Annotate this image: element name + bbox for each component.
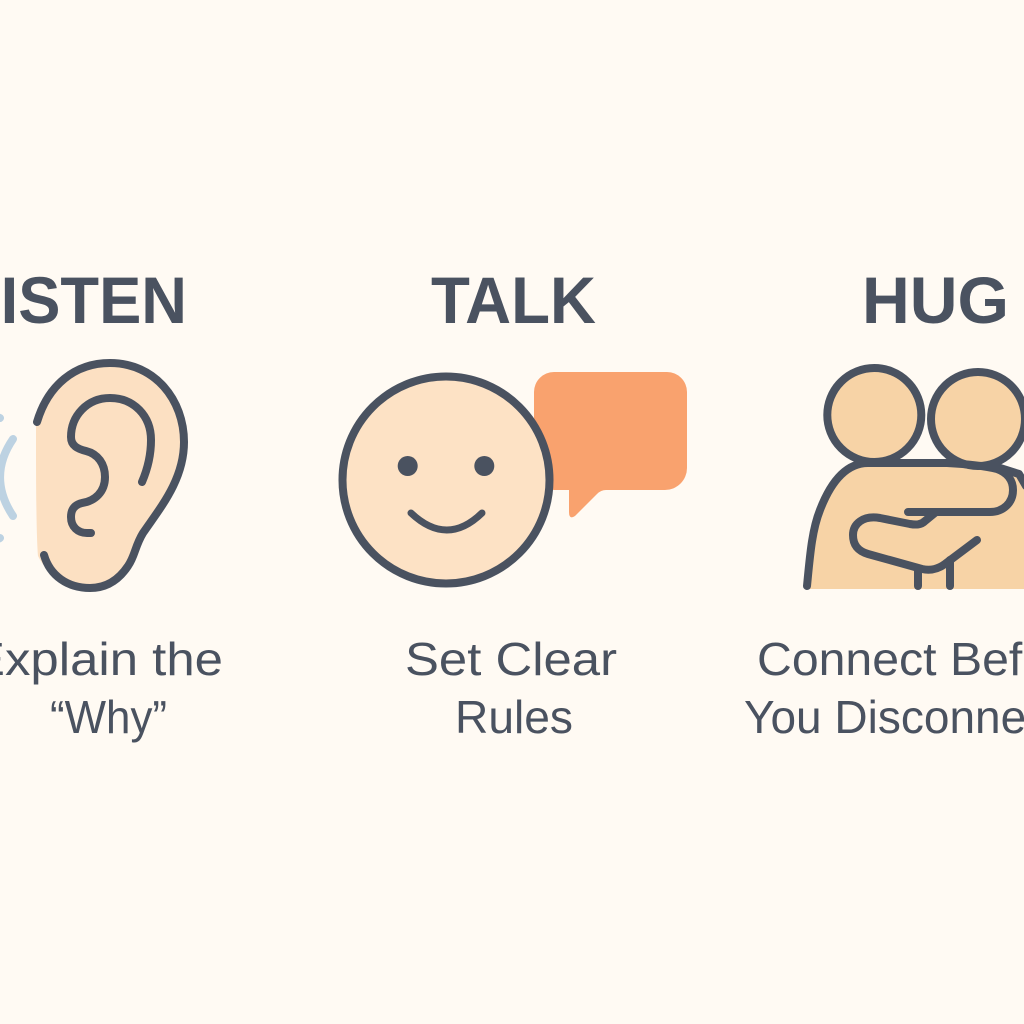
body text: set clear rules [405,633,617,743]
panel: listen [0,263,223,743]
icon: two people hugging [807,368,1024,589]
body text: connect before you disconnect [744,633,1024,743]
body text: explain the why [0,633,223,743]
body text: set clear rules: Rules [455,691,573,743]
icon: ear [36,363,184,588]
panel: talk [342,263,687,743]
body text: explain the why: “Why” [50,691,167,743]
icon: speech bubble [534,372,687,517]
body text: set clear rules: Set Clear [405,633,617,685]
panel: hug [744,263,1024,743]
heading: hug: HUG [862,263,1009,337]
icon: smiley face [342,376,550,584]
icon: sound waves [0,416,13,541]
heading: talk: TALK [431,263,596,337]
